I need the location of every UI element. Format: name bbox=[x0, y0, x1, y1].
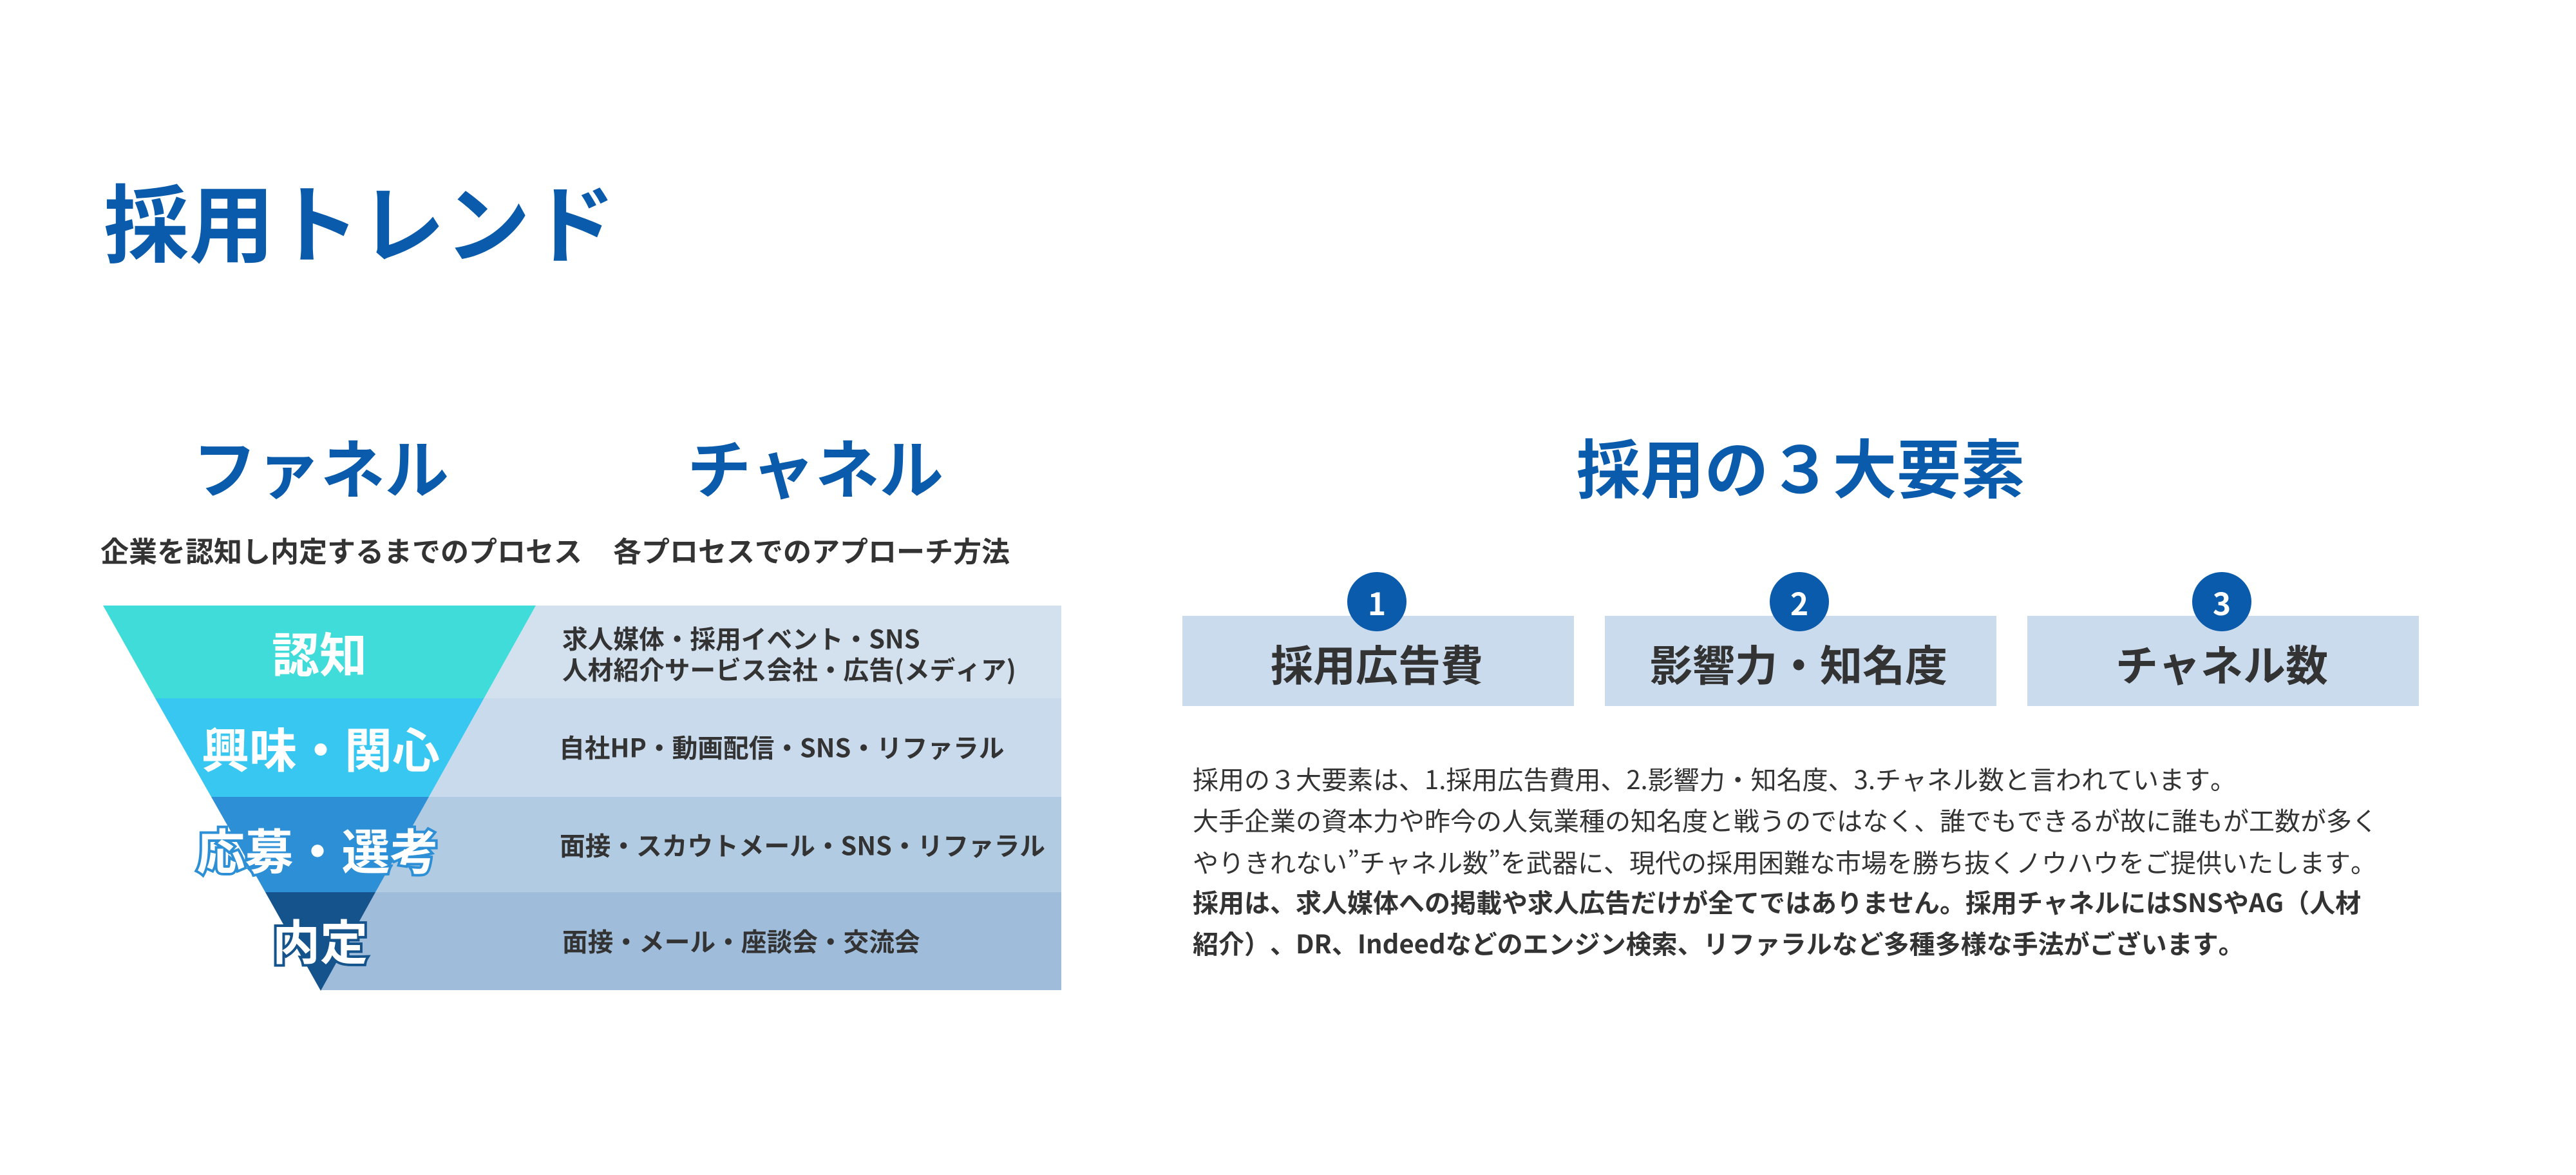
channel text: awareness: 人材紹介サービス会社・広告(メディア) bbox=[562, 651, 1016, 687]
body text: 紹介）、DR、Indeedなどのエンジン検索、リファラルなど多種多様な手法がございます。 bbox=[1193, 924, 2244, 961]
subheading: channel: 各プロセスでのアプローチ方法 bbox=[613, 529, 1010, 570]
card: channel count: 3 bbox=[2213, 579, 2231, 624]
heading: three elements: 採用の３大要素 bbox=[1577, 419, 2025, 511]
heading: channel: チャネル bbox=[687, 419, 943, 511]
card: influence and awareness: 2 bbox=[1790, 579, 1808, 624]
card: influence and awareness bbox=[1605, 572, 1996, 706]
body text: 採用の３大要素は、1.採用広告費用、2.影響力・知名度、3.チャネル数と言われています。 bbox=[1193, 759, 2236, 797]
title: 採用トレンド bbox=[104, 157, 616, 281]
channel text: awareness bbox=[562, 620, 1016, 687]
body text: やりきれない”チャネル数”を武器に、現代の採用困難な市場を勝ち抜くノウハウをご提供いたします。 bbox=[1193, 843, 2376, 880]
channel text: offer: 面接・メール・座談会・交流会 bbox=[562, 922, 920, 959]
subheading: funnel: 企業を認知し内定するまでのプロセス bbox=[100, 529, 582, 570]
funnel label: interest: 興味・関心 bbox=[202, 712, 440, 782]
heading: funnel: ファネル bbox=[193, 419, 449, 511]
card: ad cost: 採用広告費 bbox=[1271, 632, 1483, 694]
funnel label: application: 応募・選考 bbox=[196, 813, 439, 884]
body text: 採用は、求人媒体への掲載や求人広告だけが全てではありません。採用チャネルにはSNSやAG（人材 bbox=[1193, 883, 2361, 920]
channel text: interest: 自社HP・動画配信・SNS・リファラル bbox=[559, 728, 1004, 765]
chart: funnel bbox=[103, 606, 536, 991]
card: ad cost bbox=[1182, 572, 1574, 706]
body text: 大手企業の資本力や昨今の人気業種の知名度と戦うのではなく、誰でもできるが故に誰もが工数が多く bbox=[1193, 801, 2378, 838]
card: influence and awareness: 影響力・知名度 bbox=[1650, 632, 1947, 694]
card: channel count: チャネル数 bbox=[2116, 632, 2328, 694]
funnel label: awareness: 認知 bbox=[272, 617, 367, 687]
funnel label: offer: 内定 bbox=[272, 904, 368, 974]
card: channel count bbox=[2027, 572, 2419, 706]
panel: channel rows bbox=[321, 606, 1061, 990]
body text bbox=[1193, 759, 2378, 961]
channel text: awareness: 求人媒体・採用イベント・SNS bbox=[562, 620, 920, 656]
channel text: application: 面接・スカウトメール・SNS・リファラル bbox=[560, 826, 1045, 863]
card: ad cost: 1 bbox=[1368, 579, 1386, 624]
